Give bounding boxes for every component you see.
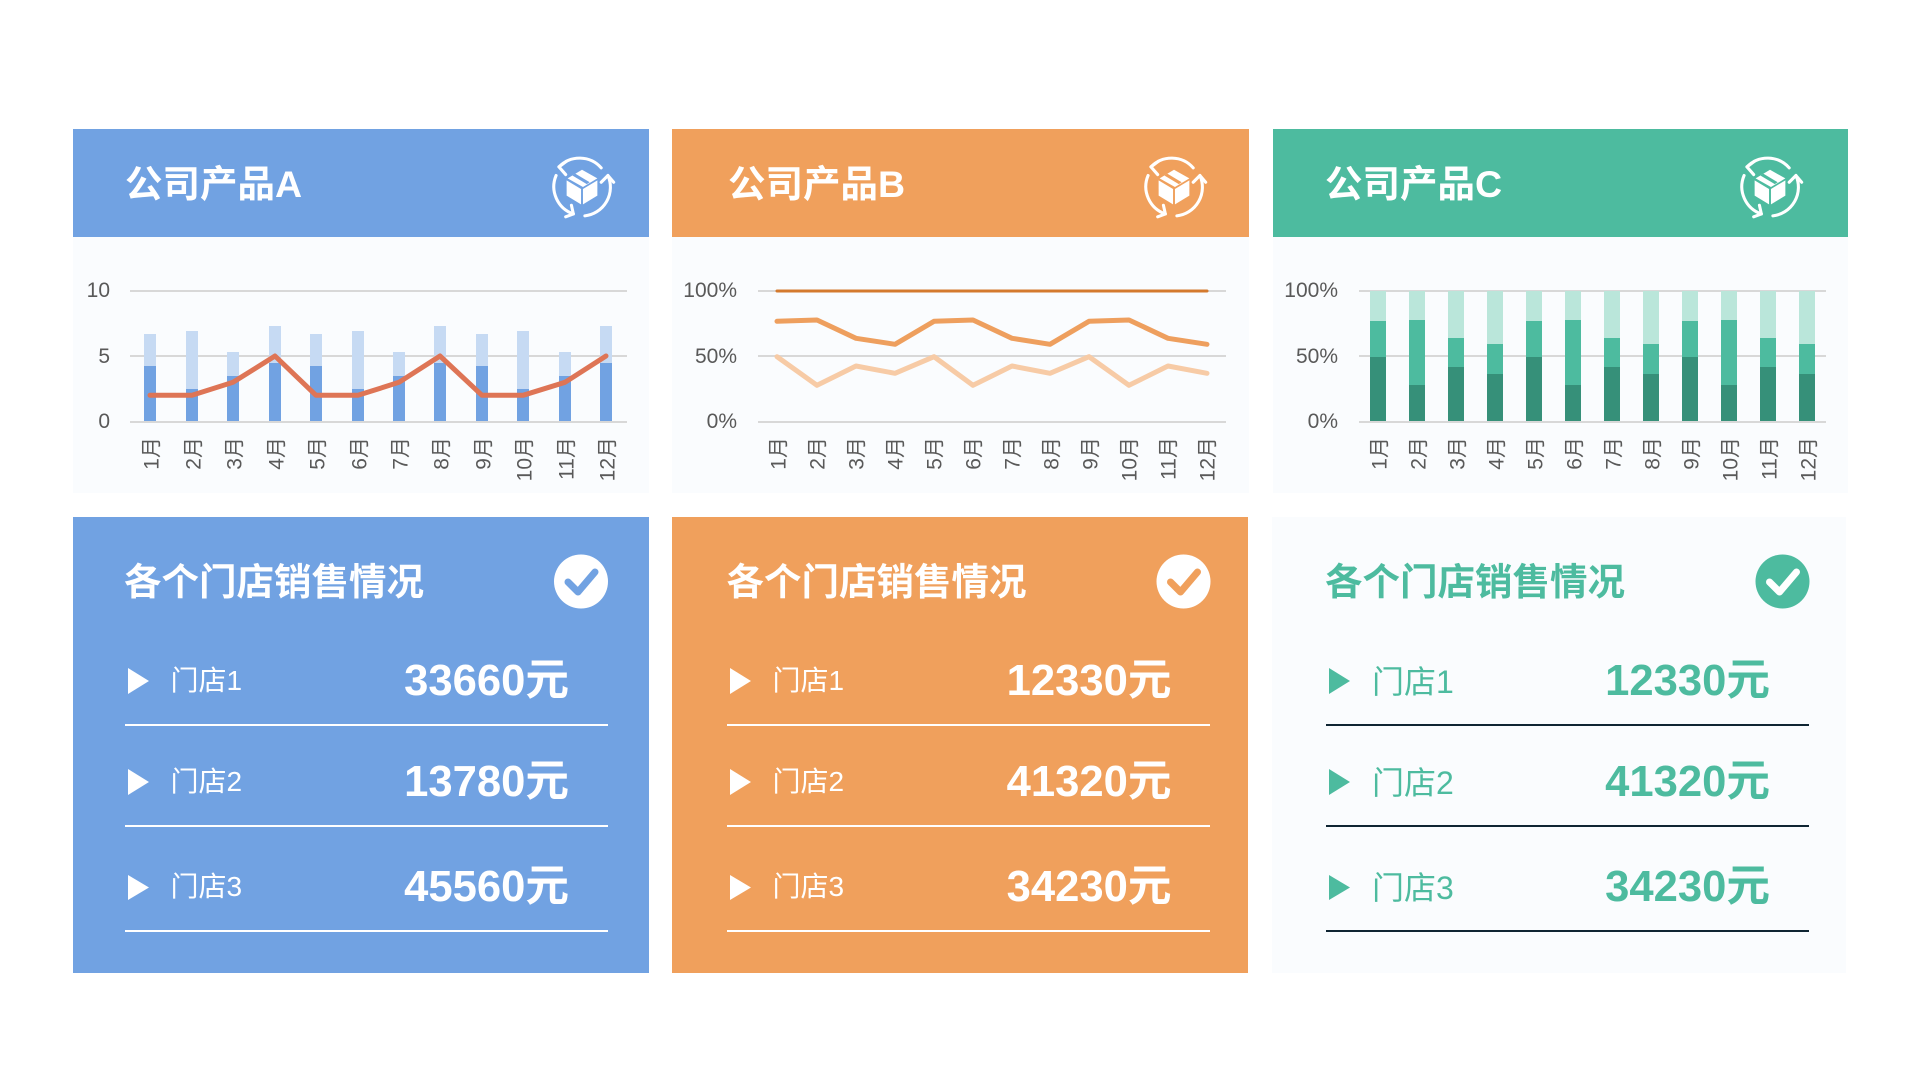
icon: package cycle [1146, 158, 1206, 217]
chart: product C stacked bars: 9月 [1680, 437, 1704, 470]
chart: product C stacked bars: 10月 [1720, 437, 1742, 481]
chart: product C stacked bars: 1月 [1368, 437, 1392, 470]
row: store 2: 41320元 [1007, 758, 1172, 806]
chart: product A bars and line: 4月 [266, 437, 288, 470]
header: product C [1273, 129, 1848, 237]
row: store 1 [125, 657, 608, 726]
icon: check badge [1156, 554, 1210, 608]
chart: product B lines: 4月 [884, 437, 908, 470]
chart: product B lines [683, 279, 1226, 481]
chart: product B lines: 7月 [1002, 437, 1024, 470]
icon: check badge [1756, 554, 1810, 608]
row: store 1: 门店1 [772, 665, 844, 696]
chart: product A bars and line: 10 [87, 279, 110, 302]
panel: store sales green [1272, 517, 1846, 973]
chart: product C stacked bars: 100% [1284, 279, 1338, 302]
chart: product A bars and line: 9月 [472, 437, 496, 470]
row: store 2: 门店2 [1372, 765, 1454, 801]
chart: product B lines: 6月 [962, 437, 986, 470]
row: store 3: 45560元 [404, 863, 569, 911]
chart: product A bars and line [87, 279, 627, 481]
row: store 2: 门店2 [170, 766, 242, 797]
chart: product A bars and line: 0 [98, 410, 110, 433]
chart: product C stacked bars: 0% [1308, 410, 1338, 433]
chart: product A bars and line: 6月 [348, 437, 372, 470]
chart: product A bars and line: 3月 [224, 437, 246, 470]
row: store 1 [727, 657, 1210, 726]
row: store 3 [1326, 863, 1809, 932]
chart: product B lines: 12月 [1196, 437, 1220, 481]
row: store 2: 13780元 [404, 758, 569, 806]
chart: product C stacked bars: 7月 [1602, 437, 1626, 470]
row: store 3: 34230元 [1007, 863, 1172, 911]
chart: product C stacked bars: 50% [1296, 345, 1338, 368]
title: product A: 公司产品A [125, 163, 302, 205]
chart: product C stacked bars: 8月 [1642, 437, 1664, 470]
chart: product C stacked bars: 12月 [1798, 437, 1820, 481]
row: store 2: 41320元 [1605, 758, 1770, 806]
chart: product B lines: 1月 [768, 437, 790, 470]
heading: store sales: 各个门店销售情况 [124, 561, 424, 603]
row: store 2 [727, 758, 1210, 827]
chart: product C stacked bars: 2月 [1408, 437, 1430, 470]
chart: product B lines: 9月 [1080, 437, 1102, 470]
chart: product A bars and line: 5月 [306, 437, 330, 470]
heading: store sales: 各个门店销售情况 [1325, 561, 1625, 603]
chart: product B lines: 10月 [1118, 437, 1142, 481]
panel: product B [672, 129, 1249, 493]
chart: product C stacked bars: 5月 [1524, 437, 1548, 470]
row: store 3: 34230元 [1605, 863, 1770, 911]
chart: product A bars and line: 11月 [556, 437, 578, 480]
chart: product B lines: 5月 [924, 437, 946, 470]
row: store 1: 33660元 [404, 657, 569, 705]
icon: package cycle [1742, 158, 1802, 217]
chart: product C stacked bars: 11月 [1758, 437, 1782, 480]
row: store 3 [727, 863, 1210, 932]
chart: product A bars and line: 5 [98, 345, 110, 368]
chart: product C stacked bars: 6月 [1564, 437, 1586, 470]
row: store 2: 门店2 [772, 766, 844, 797]
chart: product A bars and line: 8月 [430, 437, 454, 470]
row: store 3: 门店3 [170, 871, 242, 902]
row: store 3: 门店3 [1372, 870, 1454, 906]
icon: check badge [554, 554, 608, 608]
header: product A [73, 129, 649, 237]
chart: product C stacked bars: 4月 [1486, 437, 1508, 470]
panel: product A [73, 129, 649, 493]
panel: store sales blue [73, 517, 649, 973]
chart: product A bars and line: 2月 [182, 437, 206, 470]
header: product B [672, 129, 1249, 237]
chart: product B lines: 8月 [1040, 437, 1064, 470]
chart: product B lines: 11月 [1158, 437, 1180, 480]
chart: product A bars and line: 10月 [514, 437, 536, 481]
title: product C: 公司产品C [1325, 163, 1502, 205]
row: store 1: 12330元 [1605, 657, 1770, 705]
row: store 2 [1326, 758, 1809, 827]
chart: product B lines: 100% [683, 279, 737, 302]
row: store 3 [125, 863, 608, 932]
icon: package cycle [554, 158, 614, 217]
chart: product A bars and line: 7月 [390, 437, 412, 470]
title: product B: 公司产品B [728, 163, 905, 205]
row: store 1: 12330元 [1007, 657, 1172, 705]
chart: product B lines: 50% [695, 345, 737, 368]
row: store 1: 门店1 [170, 665, 242, 696]
row: store 2 [125, 758, 608, 827]
row: store 1 [1326, 657, 1809, 726]
chart: product A bars and line: 1月 [140, 437, 164, 470]
panel: product C [1273, 129, 1848, 493]
chart: product B lines: 3月 [846, 437, 868, 470]
chart: product B lines: 2月 [806, 437, 830, 470]
row: store 1: 门店1 [1372, 664, 1454, 700]
row: store 3: 门店3 [772, 871, 844, 902]
heading: store sales: 各个门店销售情况 [726, 561, 1026, 603]
panel: store sales orange [672, 517, 1248, 973]
chart: product A bars and line: 12月 [596, 437, 620, 481]
chart: product B lines: 0% [707, 410, 737, 433]
chart: product C stacked bars: 3月 [1446, 437, 1470, 470]
chart: product C stacked bars [1284, 279, 1826, 481]
